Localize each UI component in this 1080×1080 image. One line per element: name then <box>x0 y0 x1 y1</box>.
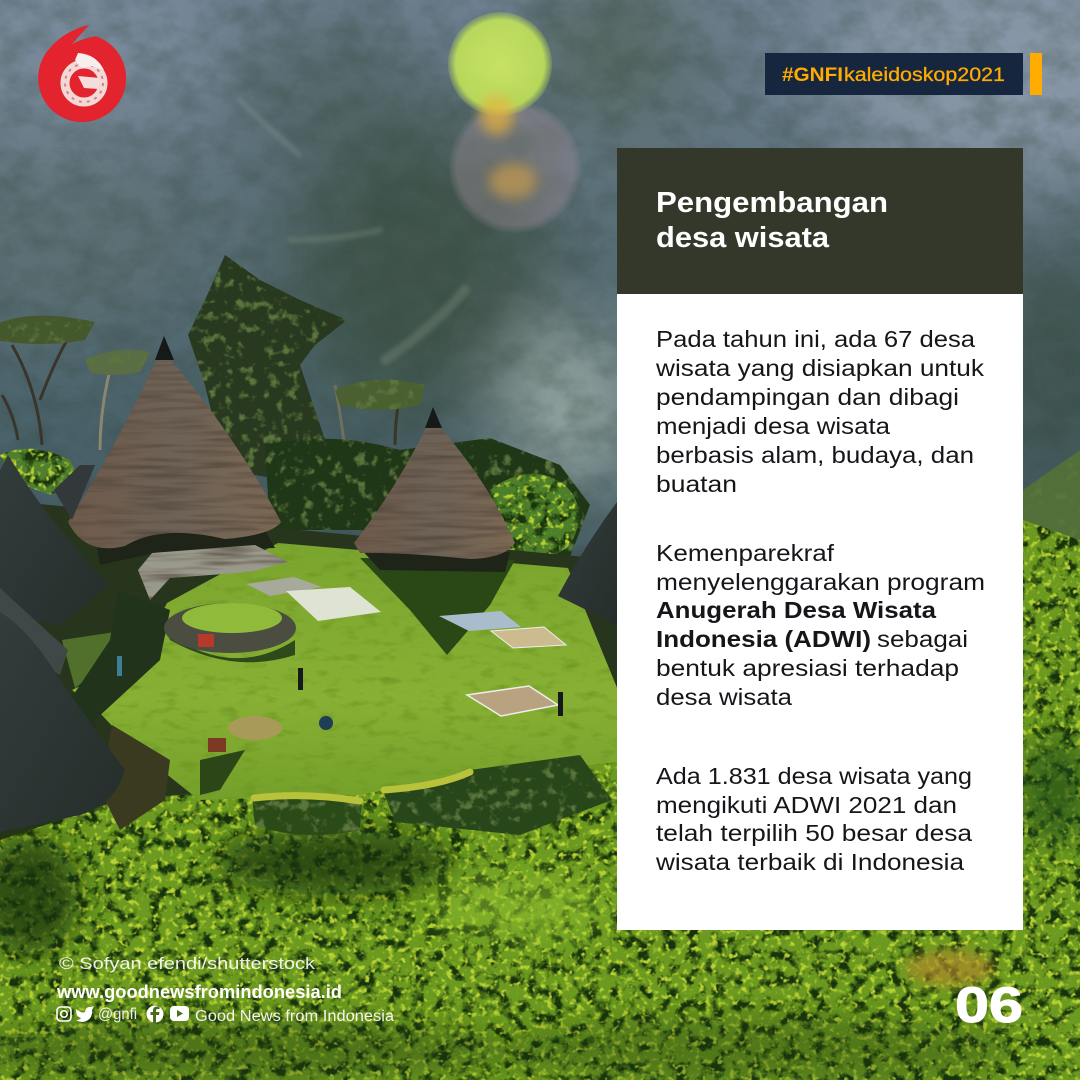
text block: 1.831 desa wisata: mengikuti ADWI 2021 dan <box>656 792 957 818</box>
dark ground under the huts <box>0 500 617 900</box>
hedge: small <box>252 794 362 835</box>
villagers <box>117 634 563 752</box>
hut: front dark cone <box>0 612 125 832</box>
hut: large thatched cone <box>68 336 281 548</box>
text block: ADWI program: desa wisata <box>656 684 793 710</box>
stone circle <box>164 603 296 653</box>
sunlit ridges <box>240 100 465 360</box>
text block: ADWI program: Indonesia (ADWI) <box>656 626 871 652</box>
text block: 67 desa wisata: buatan <box>656 471 737 497</box>
drying mats <box>246 577 322 596</box>
traditional huts <box>0 336 617 832</box>
text block: ADWI program <box>656 540 985 710</box>
text block: 67 desa wisata: Pada tahun ini, ada 67 desa <box>656 326 976 352</box>
text block: ADWI program: Kemenparekraf <box>656 540 835 566</box>
lens flares <box>448 12 581 233</box>
hut: dark back cone <box>54 465 95 520</box>
card heading: Pengembangan <box>656 187 888 219</box>
page number: 06 <box>955 977 1023 1033</box>
text block: ADWI program: sebagai <box>877 626 968 652</box>
icon: youtube <box>170 1006 189 1021</box>
background trees <box>0 255 1080 570</box>
hedge: large <box>382 755 612 835</box>
text block: 1.831 desa wisata: Ada 1.831 desa wisata yang <box>656 763 972 789</box>
text block: 1.831 desa wisata: telah terpilih 50 besar desa <box>656 820 973 846</box>
hut: small thatched cone <box>354 407 515 559</box>
text block: 67 desa wisata: wisata yang disiapkan untuk <box>655 355 984 381</box>
village lawn <box>62 530 620 835</box>
hut: left lower cone <box>0 588 68 675</box>
text block: 1.831 desa wisata <box>655 763 973 875</box>
card heading: desa wisata <box>656 222 830 254</box>
text block: ADWI program: Anugerah Desa Wisata <box>656 597 937 623</box>
panel: text card <box>617 148 1023 930</box>
photo credit: © Sofyan efendi/shutterstock <box>59 954 316 973</box>
card heading <box>617 148 1023 294</box>
handle: @gnfi <box>98 1006 137 1023</box>
icon: instagram <box>57 1007 71 1021</box>
card body background <box>617 294 1023 930</box>
hut shade under roof <box>95 530 275 565</box>
lit patch left <box>62 632 115 688</box>
text block: 67 desa wisata <box>655 326 984 497</box>
hut: left shaded cone <box>0 455 110 625</box>
hashtag badge: kaleidoskop2021 <box>844 64 1005 86</box>
hashtag badge: #GNFI <box>782 64 843 86</box>
hut shadows <box>360 558 515 655</box>
accent bar <box>1030 53 1042 95</box>
icon: twitter <box>76 1006 94 1022</box>
social row <box>57 1006 394 1025</box>
text block: 67 desa wisata: pendampingan dan dibagi <box>656 384 959 410</box>
text block: ADWI program: bentuk apresiasi terhadap <box>656 655 959 681</box>
channel name: Good News from Indonesia <box>195 1008 394 1025</box>
website: www.goodnewsfromindonesia.id <box>56 982 342 1002</box>
hut: right dark cone <box>558 502 617 625</box>
misty mountain slope <box>0 0 1080 620</box>
text block: 67 desa wisata: menjadi desa wisata <box>656 413 891 439</box>
stone terrace <box>138 545 288 600</box>
icon: facebook <box>146 1006 164 1023</box>
text block: 1.831 desa wisata: wisata terbaik di Indonesia <box>655 849 965 875</box>
hashtag badge <box>765 53 1023 95</box>
lush foreground foliage <box>0 520 1080 1080</box>
logo: GNFI <box>38 25 126 122</box>
text block: 67 desa wisata: berbasis alam, budaya, dan <box>656 442 974 468</box>
text block: ADWI program: menyelenggarakan program <box>656 569 985 595</box>
